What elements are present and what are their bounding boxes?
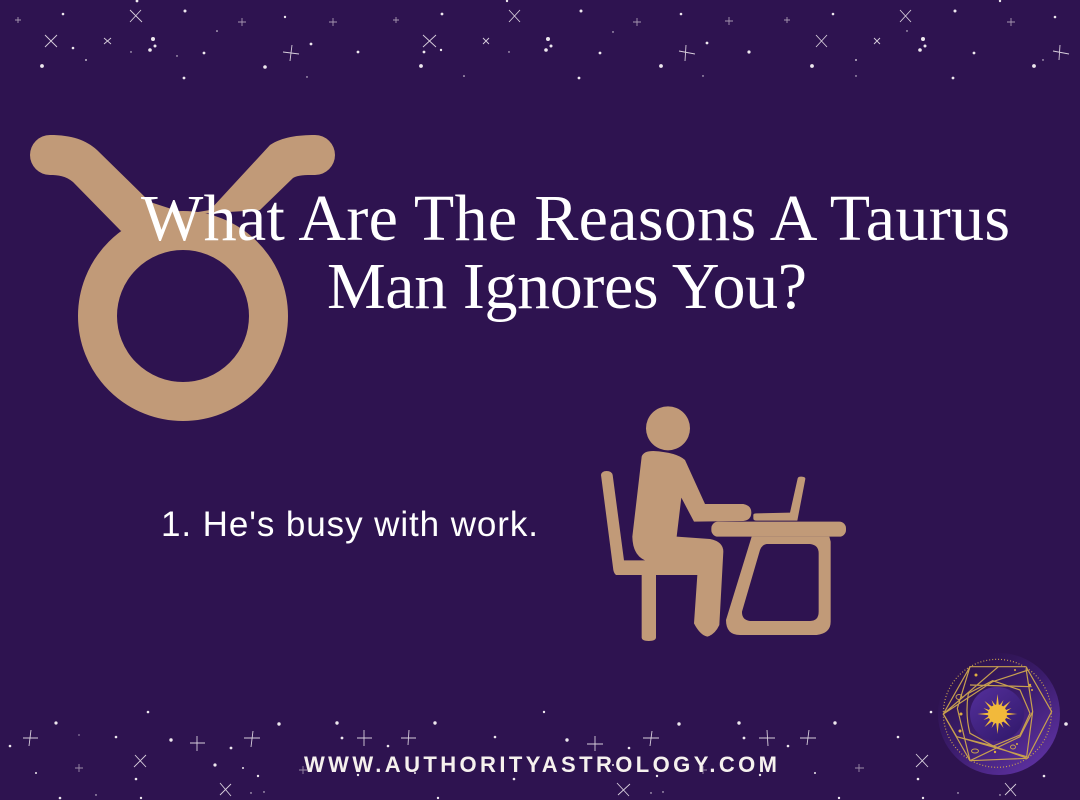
- emblem polygons: [943, 667, 1052, 761]
- icon: person working at a desk: [601, 406, 846, 641]
- taurus right horn: [180, 135, 335, 215]
- emblem disc: [938, 653, 1060, 775]
- icon: zodiac emblem: [938, 653, 1060, 775]
- emblem small gold marks: [958, 669, 1033, 753]
- icon: taurus symbol: [30, 135, 335, 402]
- desk top: [711, 522, 846, 537]
- taurus left horn: [30, 135, 190, 231]
- person head: [646, 406, 690, 450]
- emblem inner circle: [970, 687, 1024, 741]
- text: reason one: 1. He's busy with work.: [161, 505, 538, 544]
- laptop: [753, 477, 805, 521]
- title: What Are The Reasons A Taurus: [141, 182, 1010, 255]
- desk legs: [726, 537, 831, 635]
- starfield: top band: [15, 0, 1069, 79]
- emblem sun: [978, 694, 1018, 734]
- website url: WWW.AUTHORITYASTROLOGY.COM: [304, 752, 777, 777]
- person body and chair: [601, 451, 751, 641]
- starfield: bottom band: [9, 711, 1068, 799]
- title: Man Ignores You?: [327, 250, 807, 323]
- emblem dotted ring: [943, 659, 1051, 767]
- taurus ring: [98, 230, 268, 402]
